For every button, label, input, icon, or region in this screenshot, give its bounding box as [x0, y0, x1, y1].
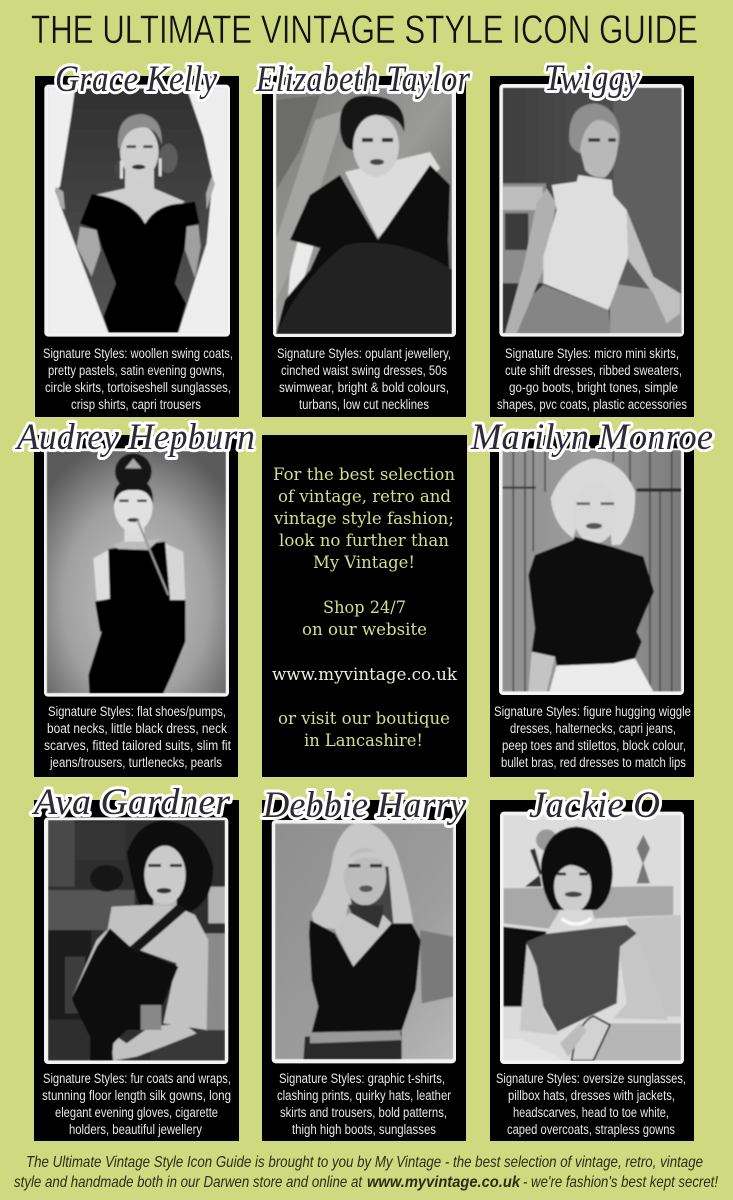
- caption: Grace Kelly: crisp shirts, capri trousers: [71, 397, 201, 412]
- photo: Audrey Hepburn: [44, 448, 229, 697]
- caption: Twiggy: Signature Styles: micro mini skirts,: [505, 346, 679, 361]
- caption: Grace Kelly: circle skirts, tortoiseshell sunglasses,: [45, 380, 231, 395]
- caption: Elizabeth Taylor: [277, 346, 451, 412]
- caption: Marilyn Monroe: bullet bras, red dresses to match lips: [501, 755, 686, 770]
- caption: Audrey Hepburn: Signature Styles: flat shoes/pumps,: [48, 704, 226, 719]
- panel: Jackie O: [490, 785, 694, 1141]
- photo: Jackie O: [500, 812, 684, 1064]
- name: Debbie Harry: Debbie Harry: [262, 785, 467, 826]
- caption: Debbie Harry: clashing prints, quirky hats, leather: [277, 1088, 451, 1103]
- caption: Marilyn Monroe: dresses, halternecks, capri jeans,: [510, 721, 676, 736]
- caption: Ava Gardner: [42, 1071, 231, 1137]
- footer text: [14, 1154, 718, 1191]
- promo text: in Lancashire!: [304, 731, 423, 750]
- caption: Ava Gardner: holders, beautiful jewellery: [69, 1122, 202, 1137]
- caption: Debbie Harry: thigh high boots, sunglasses: [292, 1122, 436, 1137]
- caption: Marilyn Monroe: [494, 704, 691, 770]
- caption: Elizabeth Taylor: Signature Styles: opulant jewellery,: [277, 346, 451, 361]
- caption: Audrey Hepburn: scarves, fitted tailored suits, slim fit: [44, 738, 231, 753]
- name: Ava Gardner: Ava Gardner: [31, 782, 231, 823]
- promo text: on our website: [302, 620, 427, 639]
- promo text: [272, 465, 458, 750]
- caption: Elizabeth Taylor: swimwear, bright & bold colours,: [279, 380, 449, 395]
- name: Jackie O: Jackie O: [529, 785, 660, 826]
- promo text: look no further than: [279, 531, 449, 550]
- promo text: For the best selection: [273, 465, 455, 484]
- photo: Twiggy: [499, 84, 684, 337]
- footer text: style and handmade both in our Darwen store and online at: [14, 1174, 362, 1191]
- caption: Audrey Hepburn: jeans/trousers, turtlenecks, pearls: [49, 755, 222, 770]
- caption: Grace Kelly: pretty pastels, satin evening gowns,: [48, 363, 225, 378]
- caption: Marilyn Monroe: peep toes and stilettos, block colour,: [502, 738, 686, 753]
- caption: Debbie Harry: Signature Styles: graphic t-shirts,: [279, 1071, 445, 1086]
- caption: Grace Kelly: [43, 346, 233, 412]
- caption: Audrey Hepburn: [44, 704, 231, 770]
- caption: Twiggy: [497, 346, 687, 412]
- promo text: Shop 24/7: [323, 598, 406, 617]
- caption: Twiggy: cute shift dresses, ribbed sweaters,: [505, 363, 682, 378]
- caption: Ava Gardner: stunning floor length silk gowns, long: [42, 1088, 231, 1103]
- caption: Debbie Harry: [277, 1071, 451, 1137]
- name: Audrey Hepburn: Audrey Hepburn: [14, 417, 255, 458]
- photo: Grace Kelly: [44, 85, 230, 337]
- promo text: www.myvintage.co.uk: [272, 665, 458, 684]
- panel: Grace Kelly: [35, 59, 239, 417]
- photo: Marilyn Monroe: [499, 448, 684, 695]
- caption: Marilyn Monroe: Signature Styles: figure hugging wiggle: [494, 704, 691, 719]
- caption: Debbie Harry: skirts and trousers, bold patterns,: [280, 1105, 447, 1120]
- caption: Twiggy: go-go boots, bright tones, simple: [509, 380, 678, 395]
- photo: Elizabeth Taylor: [273, 85, 456, 337]
- promo text: of vintage, retro and: [278, 487, 451, 506]
- name: Grace Kelly: Grace Kelly: [55, 59, 218, 100]
- name: Twiggy: Twiggy: [544, 58, 641, 99]
- caption: Elizabeth Taylor: turbans, low cut necklines: [299, 397, 429, 412]
- name: Elizabeth Taylor: Elizabeth Taylor: [255, 59, 471, 100]
- caption: Audrey Hepburn: boat necks, little black dress, neck: [47, 721, 227, 736]
- promo text: My Vintage!: [313, 553, 415, 572]
- photo: Debbie Harry: [272, 820, 456, 1063]
- panel: Audrey Hepburn: [14, 417, 255, 777]
- panel: Marilyn Monroe: [470, 417, 713, 777]
- photo: Ava Gardner: [44, 817, 228, 1064]
- panel: shop promo: [262, 435, 467, 777]
- panel: Twiggy: [490, 58, 694, 417]
- caption: Jackie O: headscarves, head to toe white,: [513, 1105, 669, 1120]
- promo text: vintage style fashion;: [273, 509, 454, 528]
- caption: Twiggy: shapes, pvc coats, plastic accessories: [497, 397, 687, 412]
- panel: Elizabeth Taylor: [255, 59, 471, 417]
- caption: Jackie O: [496, 1071, 686, 1137]
- panel: Ava Gardner: [31, 782, 239, 1141]
- caption: Jackie O: pillbox hats, dresses with jackets,: [508, 1088, 675, 1103]
- caption: Ava Gardner: elegant evening gloves, cigarette: [55, 1105, 218, 1120]
- name: Marilyn Monroe: Marilyn Monroe: [470, 417, 713, 458]
- caption: Elizabeth Taylor: cinched waist swing dresses, 50s: [281, 363, 447, 378]
- caption: Jackie O: Signature Styles: oversize sunglasses,: [496, 1071, 686, 1086]
- caption: Jackie O: caped overcoats, strapless gowns: [507, 1122, 675, 1137]
- footer text: www.myvintage.co.uk: [367, 1174, 521, 1191]
- caption: Grace Kelly: Signature Styles: woollen swing coats,: [43, 346, 233, 361]
- caption: Ava Gardner: Signature Styles: fur coats and wraps,: [43, 1071, 231, 1086]
- promo text: or visit our boutique: [278, 709, 450, 728]
- panel: Debbie Harry: [262, 785, 467, 1141]
